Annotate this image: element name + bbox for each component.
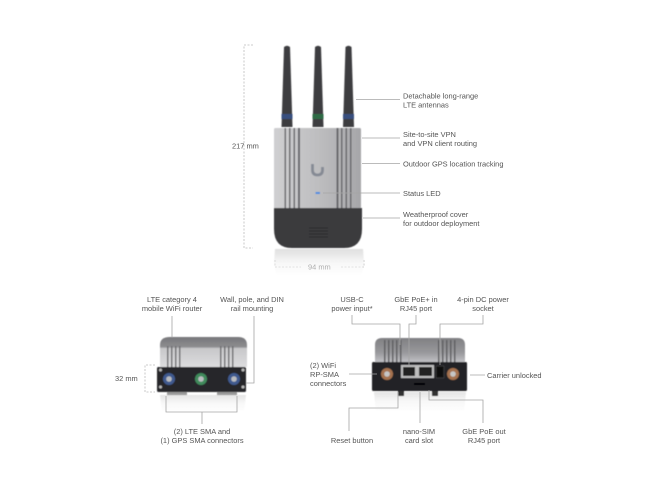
label: reset: Reset button [331, 436, 373, 445]
label: PoE in: GbE PoE+ in [394, 295, 438, 304]
label: USB-C: power input* [331, 304, 373, 313]
top device: router with antennas [274, 46, 364, 276]
label: mounting: Wall, pole, and DIN [220, 295, 284, 304]
label: SMA connectors: (1) GPS SMA connectors [160, 436, 244, 445]
vent rails [284, 128, 352, 208]
status LED [316, 192, 320, 194]
dimension: 94 mm width: 94 mm [308, 262, 331, 272]
lower left device: front view [157, 337, 247, 412]
label: cover: Weatherproof cover [403, 210, 468, 219]
label: antennas: Detachable long-range [403, 92, 478, 100]
label: VPN: and VPN client routing [403, 139, 477, 148]
dimension: 94 mm width [275, 260, 364, 272]
label: mounting: rail mounting [231, 304, 273, 313]
label: WiFi connectors: (2) WiFi [310, 361, 336, 370]
label: USB-C: USB-C [340, 295, 364, 304]
label: WiFi connectors: RP-SMA [310, 370, 339, 379]
dimension: 32 mm: 32 mm [115, 374, 138, 383]
dimension: 217 mm height [232, 45, 259, 248]
callout lines: top device [323, 100, 400, 218]
reflection [274, 249, 364, 276]
callout lines: lower right [349, 315, 485, 431]
lower right device: rear view [372, 338, 467, 412]
label: LTE category: LTE category 4 [147, 295, 197, 304]
antennas [282, 46, 354, 127]
dimension: 217 mm height: 217 mm [232, 142, 259, 150]
SMA connectors [381, 368, 459, 380]
label: SIM: nano-SIM [403, 427, 435, 436]
label: antennas: LTE antennas [403, 100, 449, 109]
weatherproof cover [274, 208, 362, 248]
label: SMA connectors: (2) LTE SMA and [174, 427, 230, 436]
connectors [163, 373, 240, 385]
callout lines: lower left [166, 316, 254, 424]
label: DC socket: 4-pin DC power [457, 295, 509, 304]
label: PoE out: GbE PoE out [462, 427, 506, 436]
label: cover: for outdoor deployment [403, 219, 480, 228]
DC socket [436, 366, 444, 378]
label: PoE in: RJ45 port [400, 304, 433, 313]
label: LTE category: mobile WiFi router [142, 304, 203, 313]
label: DC socket: socket [472, 304, 495, 313]
label: SIM: card slot [405, 436, 434, 445]
label: status LED: Status LED [403, 189, 441, 198]
icon: logo [312, 164, 322, 175]
label: PoE out: RJ45 port [468, 436, 501, 445]
dimension: 32 mm [115, 365, 155, 392]
label: GPS: Outdoor GPS location tracking [403, 160, 503, 168]
label: WiFi connectors: connectors [310, 379, 347, 388]
label: VPN: Site-to-site VPN [403, 130, 456, 139]
RJ45 ports [401, 365, 434, 378]
body [274, 128, 361, 210]
SIM slot [414, 383, 425, 385]
label: carrier unlocked: Carrier unlocked [487, 371, 542, 380]
